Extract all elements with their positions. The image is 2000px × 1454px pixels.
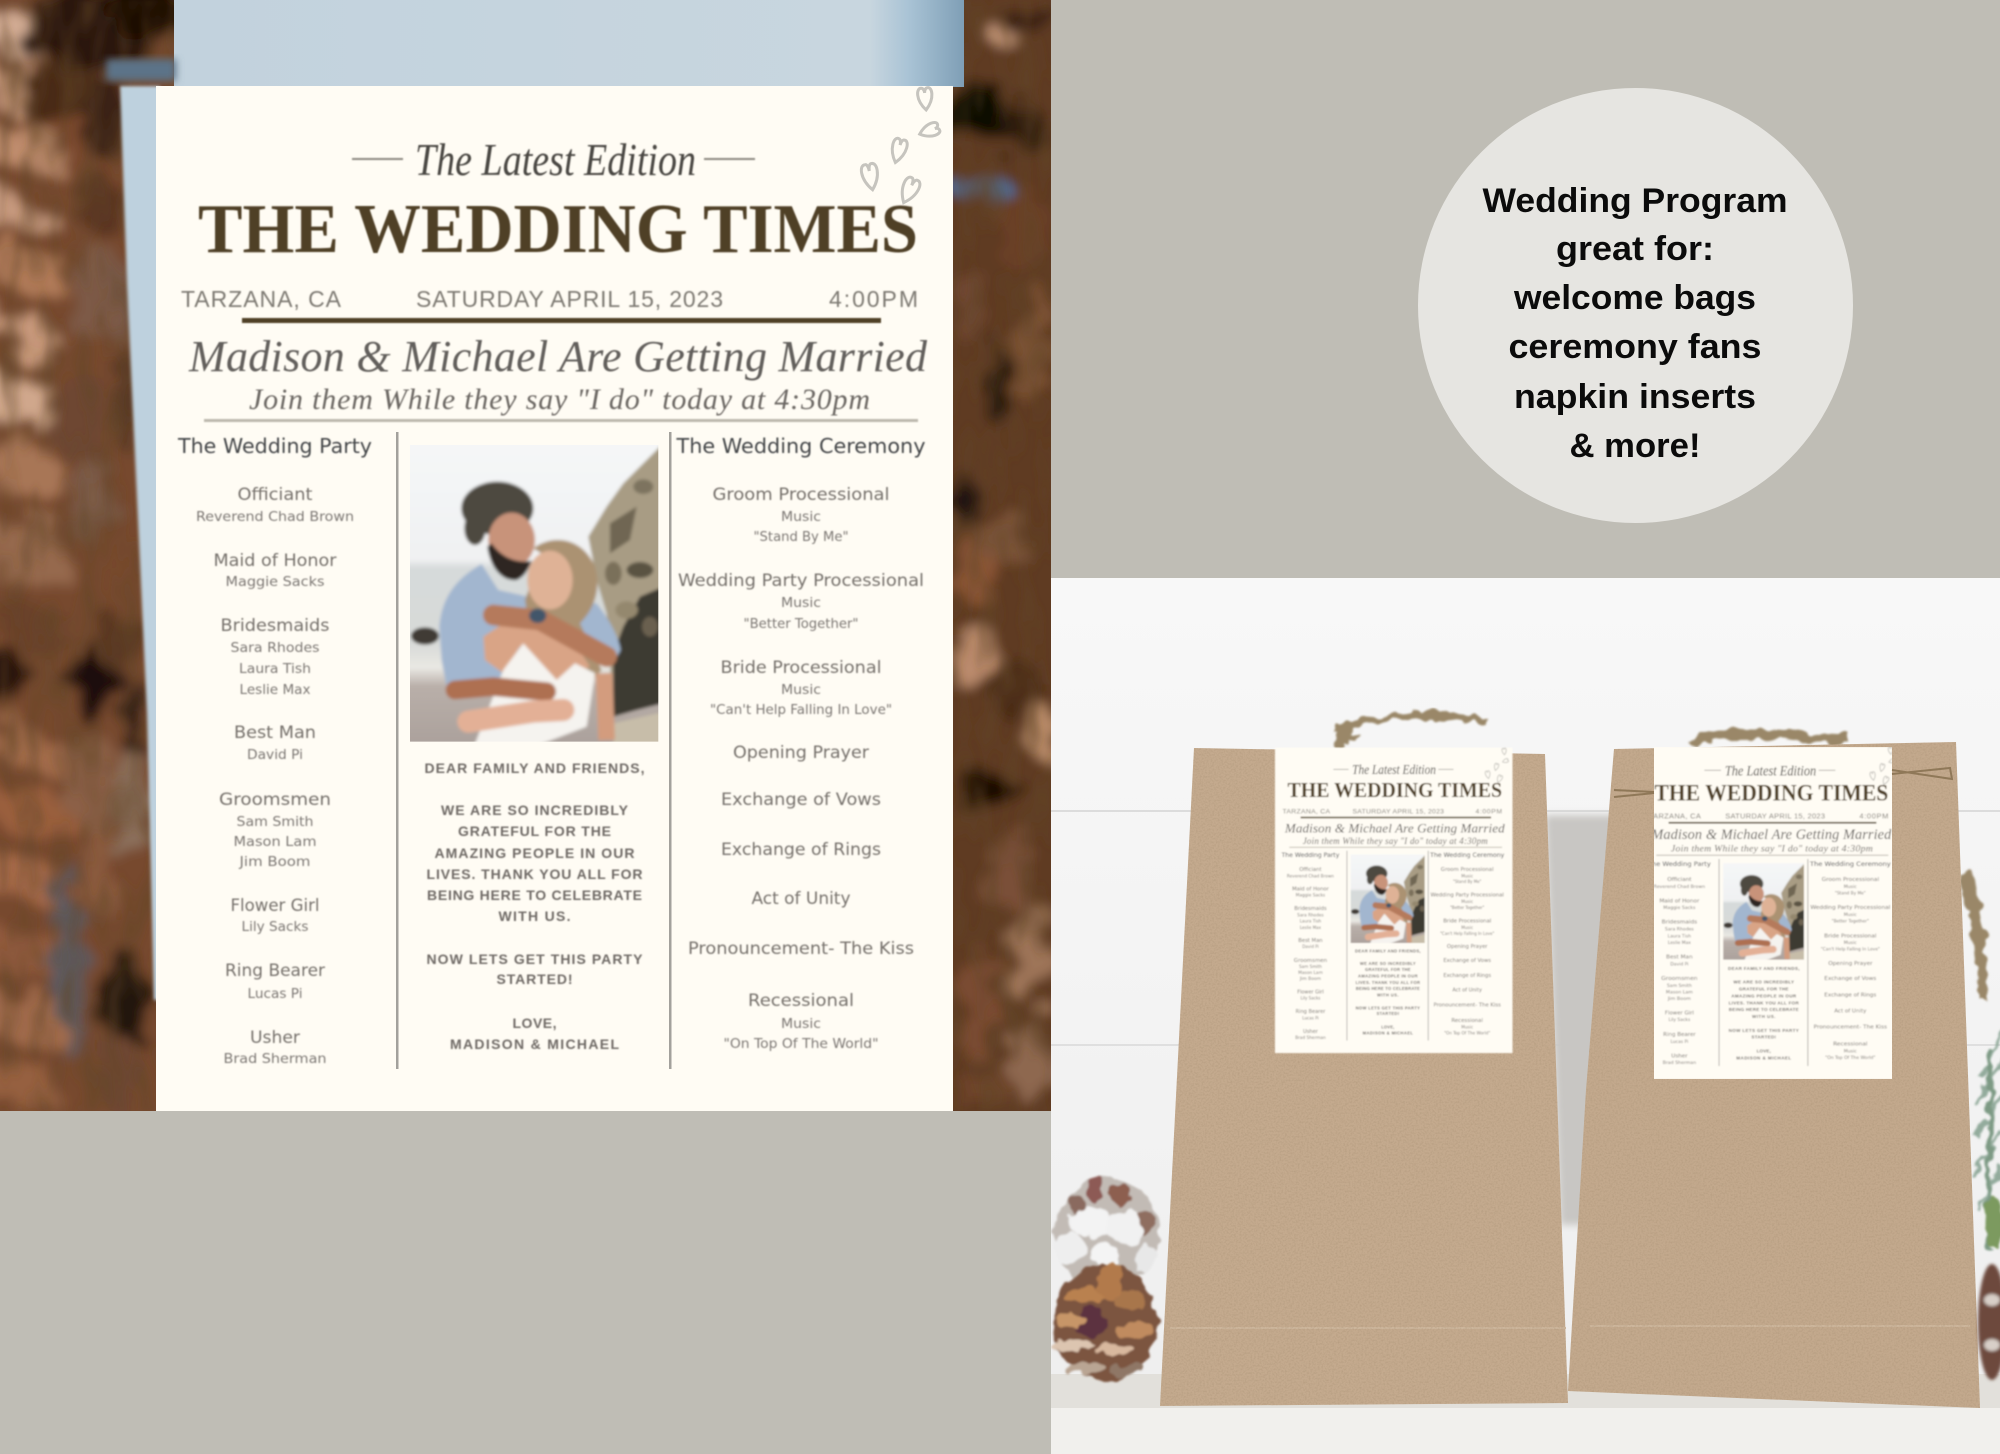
headline: Madison & Michael Are Getting Married [188,332,928,381]
man's beard [487,543,532,580]
woman's chest [483,620,590,680]
column: the wedding party: Officiant [238,485,313,505]
thin rule [204,419,918,422]
column: the wedding ceremony: "Stand By Me" [754,529,848,545]
bag 1 twine [1335,715,1490,750]
pine cone: right edge [1978,1264,2000,1380]
card paper [156,86,953,1111]
column: the wedding ceremony: Recessional [748,991,854,1011]
man's hair [461,482,533,535]
column: the wedding party: Best Man [234,723,316,743]
right rope strip [953,0,1051,1111]
column: the wedding ceremony: Music [781,1016,821,1032]
blurred paper behind the card [174,0,964,87]
column: the wedding ceremony: Bride Processional [720,658,882,678]
white plank wall [1051,578,2000,1454]
column: the wedding party: Reverend Chad Brown [196,509,354,525]
place, date, time [181,286,918,312]
column: the wedding party: Lucas Pi [248,986,302,1002]
column: the wedding party: Brad Sherman [224,1051,326,1067]
thick rule [242,318,881,323]
edition line: The Latest Edition [415,134,696,185]
letter to guests: DEAR FAMILY AND FRIENDS, [424,760,644,776]
column: the wedding party: Groomsmen [219,790,331,810]
column: the wedding party: The Wedding Party [177,434,372,458]
column: the wedding party: Bridesmaids [220,616,330,636]
white dress [473,643,595,748]
column: the wedding party: Maid of Honor [214,551,336,571]
column: the wedding party [177,434,372,1067]
greenery [1974,1030,2000,1250]
man's shirt [439,564,621,697]
woman's face [527,551,573,609]
callout text: welcome bags [1513,279,1756,317]
miniature program on bag 2 [1641,747,1900,1080]
callout text: ceremony fans [1508,328,1762,366]
pine cone: frosted white [1054,1177,1159,1289]
masthead [181,134,928,422]
shelf [1051,1374,2000,1408]
letter to guests: NOW LETS GET THIS PARTY [426,951,643,967]
letter to guests: BEING HERE TO CELEBRATE [427,887,642,903]
column: the wedding party: Laura Tish [239,661,311,677]
column: the wedding ceremony: "Better Together" [744,616,858,632]
column: the wedding ceremony: Music [781,509,821,525]
photo: rope backdrop with program card [0,0,1051,1111]
column: the wedding ceremony: "Can't Help Falling In Love" [710,702,892,718]
pine cone: brown [1053,1262,1157,1380]
man's lower arm [455,687,547,692]
column: the wedding party: Sara Rhodes [230,640,320,656]
program card [156,86,953,1111]
column: the wedding party: Jim Boom [238,854,310,870]
callout text [1482,182,1788,465]
column: the wedding party: Maggie Sacks [226,574,324,590]
column: the wedding ceremony: "On Top Of The World" [724,1036,878,1052]
left rope strip [0,0,174,1111]
watch [529,608,546,623]
column: the wedding ceremony: Exchange of Rings [721,840,881,860]
back page edge [120,86,160,1000]
man's upper forearm [493,615,607,657]
column: the wedding party: Flower Girl [230,896,320,916]
column: the wedding party: Mason Lam [234,834,316,850]
column: the wedding ceremony: Music [781,682,821,698]
column: the wedding party: Ring Bearer [225,961,325,981]
column: the wedding ceremony: Groom Processional [712,485,890,505]
subheadline: Join them While they say "I do" today at 4:30pm [249,383,870,416]
woman's hair [525,540,602,687]
callout text: & more! [1570,427,1700,465]
column: the wedding ceremony [675,434,926,1052]
bag 1 [1160,748,1568,1406]
column: the wedding ceremony: Exchange of Vows [721,790,881,810]
letter to guests: WITH US. [498,908,570,924]
column: the wedding ceremony: Music [781,595,821,611]
sand at right [613,712,665,748]
callout text: napkin inserts [1514,378,1756,416]
woman's forearm [468,710,563,722]
bag 2 [1568,742,1980,1408]
letter to guests: MADISON & MICHAEL [450,1036,619,1052]
callout text: Wedding Program [1482,182,1788,220]
bag 2 twine [1690,734,1982,1000]
photo: kraft welcome bags on a shelf [1051,578,2000,1454]
column: the wedding party: Leslie Max [240,682,311,698]
blue shadow patch [106,59,176,81]
callout: wedding program uses [1418,88,1853,523]
place, date, time: 4:00PM [829,286,918,312]
column: the wedding ceremony: Pronouncement- The Kiss [688,939,914,959]
large rock [588,443,663,717]
sky, sea and sand [403,438,665,748]
letter to guests: STARTED! [496,971,572,987]
miniature program on bag 1 [1275,748,1512,1053]
column: the wedding ceremony: The Wedding Ceremony [675,434,926,458]
newspaper title: THE WEDDING TIMES [198,191,918,268]
kraft paper speckle [1150,740,1990,1420]
rope strand texture [0,0,1051,1111]
column: the wedding party: David Pi [247,747,303,763]
string ties on bag 2 [1614,768,1952,797]
hearts decoration [860,87,941,206]
letter to guests: LOVE, [512,1015,556,1031]
column: the wedding party: Lily Sacks [242,919,308,935]
column: the wedding party: Usher [250,1028,300,1048]
man's face [488,513,535,567]
letter to guests: WE ARE SO INCREDIBLY [441,802,629,818]
letter to guests [424,760,644,1052]
column: the wedding ceremony: Wedding Party Processional [678,571,924,591]
place, date, time: TARZANA, CA [181,286,342,312]
column: the wedding party: Sam Smith [236,814,314,830]
letter to guests: LIVES. THANK YOU ALL FOR [426,866,642,882]
place, date, time: SATURDAY APRIL 15, 2023 [416,286,723,312]
small dark rock [411,627,439,645]
callout text: great for: [1556,230,1714,268]
letter to guests: AMAZING PEOPLE IN OUR [434,845,634,861]
woman's arm [604,673,607,740]
photo: couple embracing on the beach [403,438,665,748]
callout circle [1418,88,1853,523]
column dividers [396,432,672,1069]
shadow between bags [1547,812,1608,1228]
column: the wedding ceremony: Act of Unity [752,889,850,909]
column: the wedding ceremony: Opening Prayer [733,743,869,763]
letter to guests: GRATEFUL FOR THE [458,823,611,839]
